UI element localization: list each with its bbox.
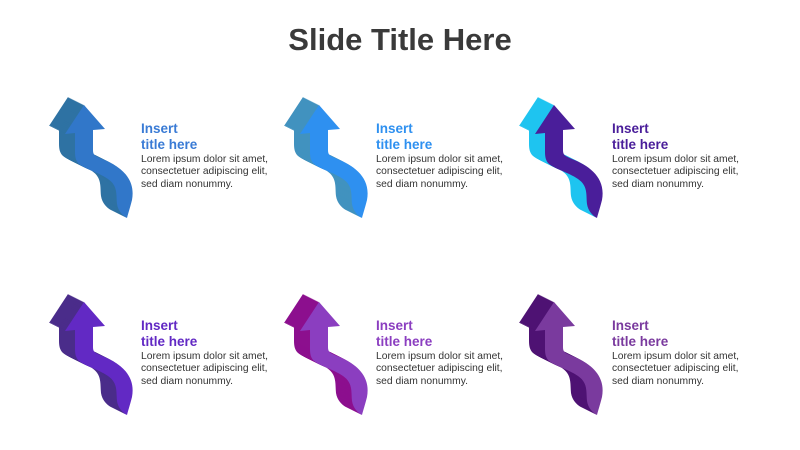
- text block 2: sed diam nonummy.: [376, 179, 468, 190]
- text block 1: title here: [141, 137, 197, 152]
- icon: arrow 2: [284, 97, 368, 218]
- text block 3: consectetuer adipiscing elit,: [612, 166, 738, 177]
- title: Slide Title Here: [288, 22, 512, 57]
- text block 3: Insert: [612, 121, 649, 136]
- text block 5: Lorem ipsum dolor sit amet,: [376, 351, 503, 362]
- text block 3: title here: [612, 137, 668, 152]
- icon: arrow 6: [519, 294, 603, 415]
- text block 4: title here: [141, 334, 197, 349]
- text block 3: [612, 121, 739, 190]
- text block 4: [141, 318, 268, 387]
- text block 5: sed diam nonummy.: [376, 376, 468, 387]
- text block 1: Lorem ipsum dolor sit amet,: [141, 154, 268, 165]
- text block 3: Lorem ipsum dolor sit amet,: [612, 154, 739, 165]
- text block 5: title here: [376, 334, 432, 349]
- icon: arrow 5: [284, 294, 368, 415]
- text block 2: consectetuer adipiscing elit,: [376, 166, 502, 177]
- icon: arrow 3: [519, 97, 603, 218]
- text block 6: sed diam nonummy.: [612, 376, 704, 387]
- text block 6: [612, 318, 739, 387]
- text block 6: consectetuer adipiscing elit,: [612, 363, 738, 374]
- text block 1: sed diam nonummy.: [141, 179, 233, 190]
- text block 4: Insert: [141, 318, 178, 333]
- text block 5: [376, 318, 503, 387]
- text block 5: Insert: [376, 318, 413, 333]
- text block 6: Insert: [612, 318, 649, 333]
- text block 2: title here: [376, 137, 432, 152]
- icon: arrow 4: [49, 294, 133, 415]
- text block 6: title here: [612, 334, 668, 349]
- text block 1: consectetuer adipiscing elit,: [141, 166, 268, 177]
- text block 5: consectetuer adipiscing elit,: [376, 363, 502, 374]
- text block 4: Lorem ipsum dolor sit amet,: [141, 351, 268, 362]
- text block 1: [141, 121, 268, 190]
- text block 6: Lorem ipsum dolor sit amet,: [612, 351, 739, 362]
- text block 2: [376, 121, 503, 190]
- icon: arrow 1: [49, 97, 133, 218]
- text block 2: Lorem ipsum dolor sit amet,: [376, 154, 503, 165]
- text block 3: sed diam nonummy.: [612, 179, 704, 190]
- text block 4: sed diam nonummy.: [141, 376, 233, 387]
- text block 4: consectetuer adipiscing elit,: [141, 363, 268, 374]
- text block 1: Insert: [141, 121, 178, 136]
- text block 2: Insert: [376, 121, 413, 136]
